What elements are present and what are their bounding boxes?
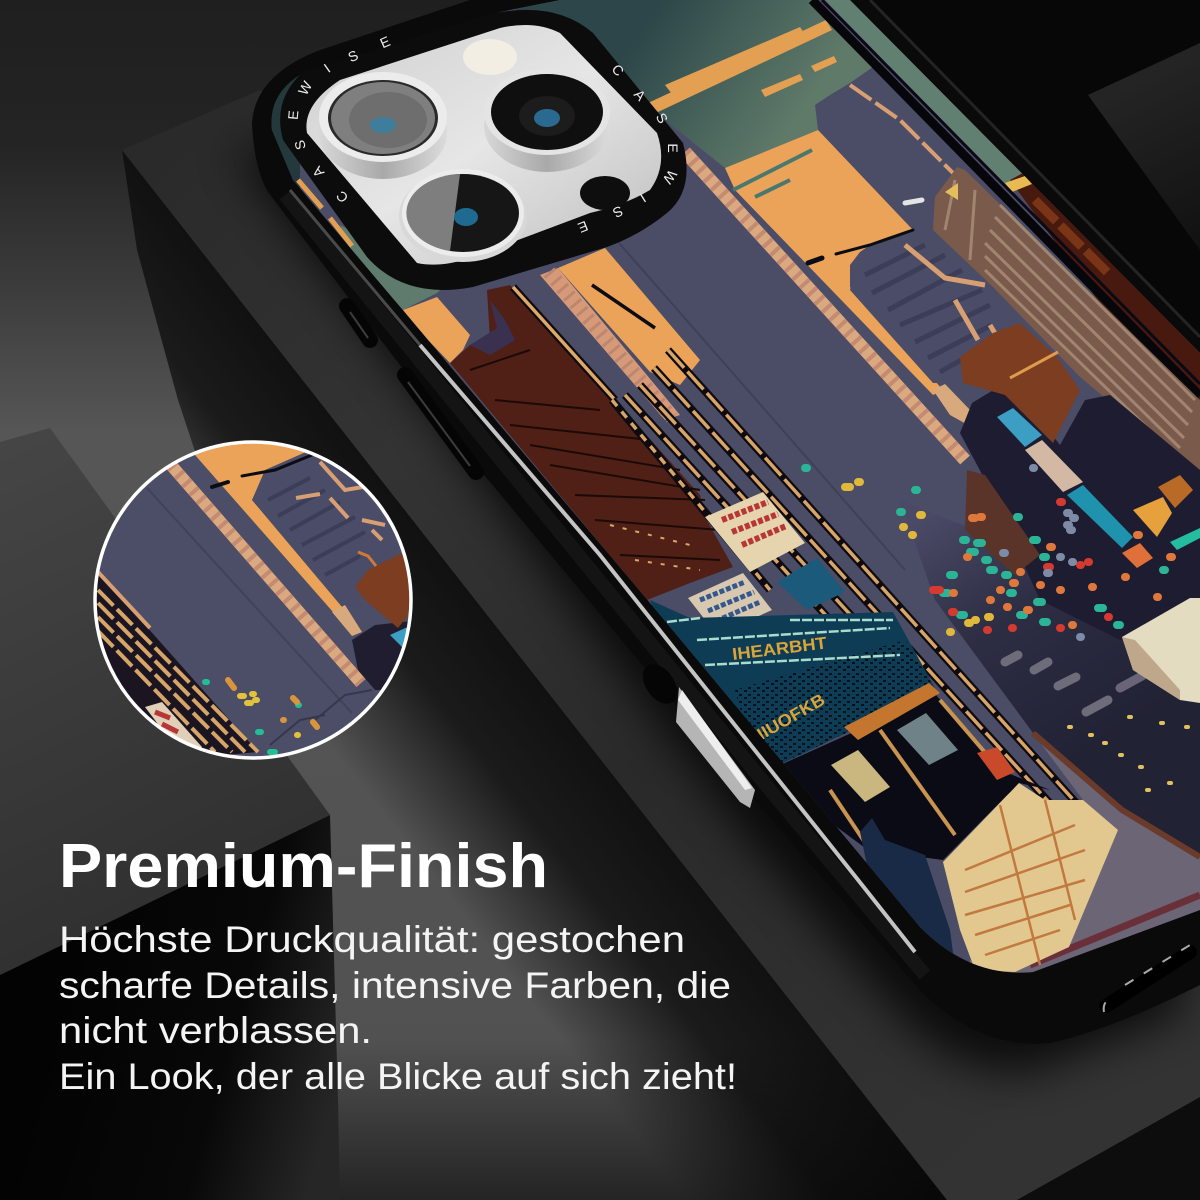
orange sky (195, 440, 342, 612)
storefront speckle (735, 640, 936, 775)
right rim (870, 0, 1200, 337)
storefront yellow lettering: IHEARBHT (731, 633, 828, 664)
flash (463, 39, 517, 75)
roof light specks (610, 525, 700, 570)
lens upper left (319, 72, 447, 179)
orange edge dashes (298, 180, 352, 246)
edge upper shade (290, 190, 420, 345)
black frame lines in art (812, 0, 1200, 396)
side buttons (347, 306, 476, 472)
magnifier circle (90, 440, 420, 760)
ring lettering left (285, 33, 393, 206)
pale pole edge (98, 572, 150, 628)
blue sign (997, 408, 1042, 447)
roof crack lines (470, 350, 720, 560)
dark storefront (758, 695, 1050, 860)
edge highlight (420, 345, 915, 952)
yellow sign (1133, 497, 1172, 537)
pale band stripes (685, 152, 965, 460)
silver button highlight (678, 690, 752, 790)
rust building strip (1010, 174, 1200, 400)
lower pale band (540, 268, 680, 420)
sign: blue panel (777, 558, 845, 610)
orange corner (403, 297, 470, 363)
block: top right face (1088, 43, 1200, 250)
storefront lower lettering: IIIUOFKB (750, 690, 828, 746)
cyan sign (390, 625, 412, 650)
teal storefront (650, 600, 936, 775)
island glass plate (306, 25, 661, 265)
utility poles tan (612, 350, 1078, 810)
soft block shadow on floor (122, 150, 947, 1200)
yellow roof detail (1005, 176, 1032, 192)
ring lettering left: S (291, 138, 309, 152)
magnified artwork (90, 440, 420, 760)
band stripes (171, 465, 361, 683)
lamp (212, 455, 312, 487)
phone side band (285, 195, 925, 975)
roof edge tan (513, 287, 615, 400)
body text: nicht verblassen. (59, 1010, 372, 1051)
roof pipe (358, 552, 376, 566)
sign red marks (155, 712, 178, 732)
tan pole dashes (98, 590, 258, 752)
bottom port (1106, 952, 1190, 1006)
brick lines (965, 800, 1085, 965)
body text: scharfe Details, intensive Farben, die (59, 965, 731, 1006)
block: lower left top face (0, 428, 330, 975)
dark buildings mass (960, 380, 1200, 650)
dim brown building (965, 470, 1040, 575)
ring lettering left: E (377, 33, 393, 51)
ring lettering left: S (345, 47, 361, 65)
sky strip beyond black line (825, 0, 1023, 190)
shop posts (830, 700, 1000, 850)
ring lettering left: C (333, 188, 351, 206)
cream brick pavement (943, 783, 1118, 972)
red kerb (1030, 895, 1200, 965)
lower teal patch (340, 225, 450, 310)
camera island (280, 10, 687, 290)
orange shop sign (844, 683, 940, 740)
phone drop shadow (234, 128, 1182, 1072)
purple wall (470, 300, 515, 355)
shop window grey (897, 713, 958, 765)
utility poles black (612, 350, 1078, 810)
tall tan building (933, 167, 1200, 475)
magnifier ring (95, 442, 411, 758)
brown sign (1158, 475, 1193, 508)
ring lettering left: I (321, 60, 333, 76)
cars (1005, 655, 1142, 712)
ring lettering right (576, 61, 681, 236)
white van (1122, 598, 1200, 703)
shop window cream (831, 750, 890, 802)
port highlight (1104, 945, 1190, 1012)
ring lettering right: E (576, 218, 590, 236)
pale block end (933, 384, 970, 423)
block: lower left front face (0, 815, 340, 1200)
shop window red (977, 747, 1015, 780)
brown roof highlight (1010, 352, 1058, 378)
art base slate (260, 0, 1200, 1000)
roof edge pole (513, 287, 615, 400)
lens lower (399, 169, 527, 262)
ring lettering left: W (295, 78, 316, 98)
ring lettering right: W (659, 167, 680, 188)
skyscraper pale wisps (296, 462, 385, 540)
upper orange bars (648, 20, 837, 112)
rust patches (1035, 200, 1110, 275)
phone body (252, 0, 1200, 1044)
street dark base (919, 525, 1200, 854)
ring lettering right: I (637, 190, 649, 206)
magnified lights (205, 680, 317, 752)
yellow building corner (945, 183, 958, 200)
ring lettering right: S (653, 110, 671, 126)
sign: red lettering (705, 492, 805, 572)
pedestrian figure (860, 818, 955, 968)
sky teal (500, 0, 880, 168)
brown roof building (960, 323, 1080, 443)
ring lettering right: E (665, 143, 681, 153)
button recess (636, 658, 684, 710)
phone (252, 0, 1200, 1044)
slate base (90, 440, 420, 760)
heading: Premium-Finish (59, 832, 548, 901)
body text (59, 919, 737, 1097)
road dots (1069, 717, 1188, 790)
ragged tower edge (850, 85, 953, 173)
ring lettering right: C (609, 61, 627, 79)
street lamp (808, 200, 922, 263)
ring lettering left: A (308, 163, 327, 181)
magnified wires (270, 690, 372, 745)
silver side button (676, 687, 755, 808)
pale sign (1025, 440, 1083, 492)
grey pavement (960, 733, 1200, 975)
orange small sign (1122, 543, 1153, 568)
brown roof building left (450, 285, 733, 600)
faint road line (612, 235, 905, 570)
lower tower (850, 288, 937, 383)
lower lamp line (592, 285, 655, 328)
magnified sign (145, 702, 202, 756)
dark building (352, 620, 420, 690)
faint road line (147, 488, 352, 713)
body text: Ein Look, der alle Blicke auf sich zieht! (59, 1056, 737, 1097)
sensor dot (580, 176, 630, 210)
tan building stripes (945, 180, 1195, 452)
ring lettering right: A (631, 86, 650, 104)
ring lettering left: E (285, 110, 301, 120)
skyscraper window lines (268, 478, 365, 575)
background bottom shading (0, 1040, 1200, 1200)
block: main base front (1017, 1097, 1200, 1200)
skyscraper (252, 460, 402, 610)
tower pale wisps (904, 243, 997, 342)
pole mass (90, 572, 258, 760)
lower left teal strip (272, 76, 300, 188)
tower window lines (865, 245, 992, 372)
teal sign (1067, 485, 1133, 548)
lens upper right (484, 69, 610, 172)
ring lettering right: S (610, 203, 626, 221)
van side (1122, 637, 1180, 700)
storefront neon lines (667, 618, 900, 665)
phone artwork: pixel city street (260, 0, 1200, 1000)
pale striped band (685, 152, 965, 460)
brown building (355, 550, 420, 628)
green sign (1170, 528, 1200, 550)
lower pale band stripes (549, 272, 672, 418)
brown road edge (1033, 733, 1200, 857)
dark wall top right (760, 0, 1200, 420)
pale block (332, 605, 362, 636)
body text: Höchste Druckqualität: gestochen (59, 919, 685, 960)
lower orange panel (558, 248, 700, 385)
teal streaks on orange (733, 150, 812, 197)
orange sky panel (725, 130, 943, 395)
pale striped band (171, 465, 361, 683)
sign: blue lettering (688, 573, 772, 635)
island black frame (280, 10, 687, 290)
street lights (805, 468, 1172, 637)
cream corner (918, 925, 960, 968)
